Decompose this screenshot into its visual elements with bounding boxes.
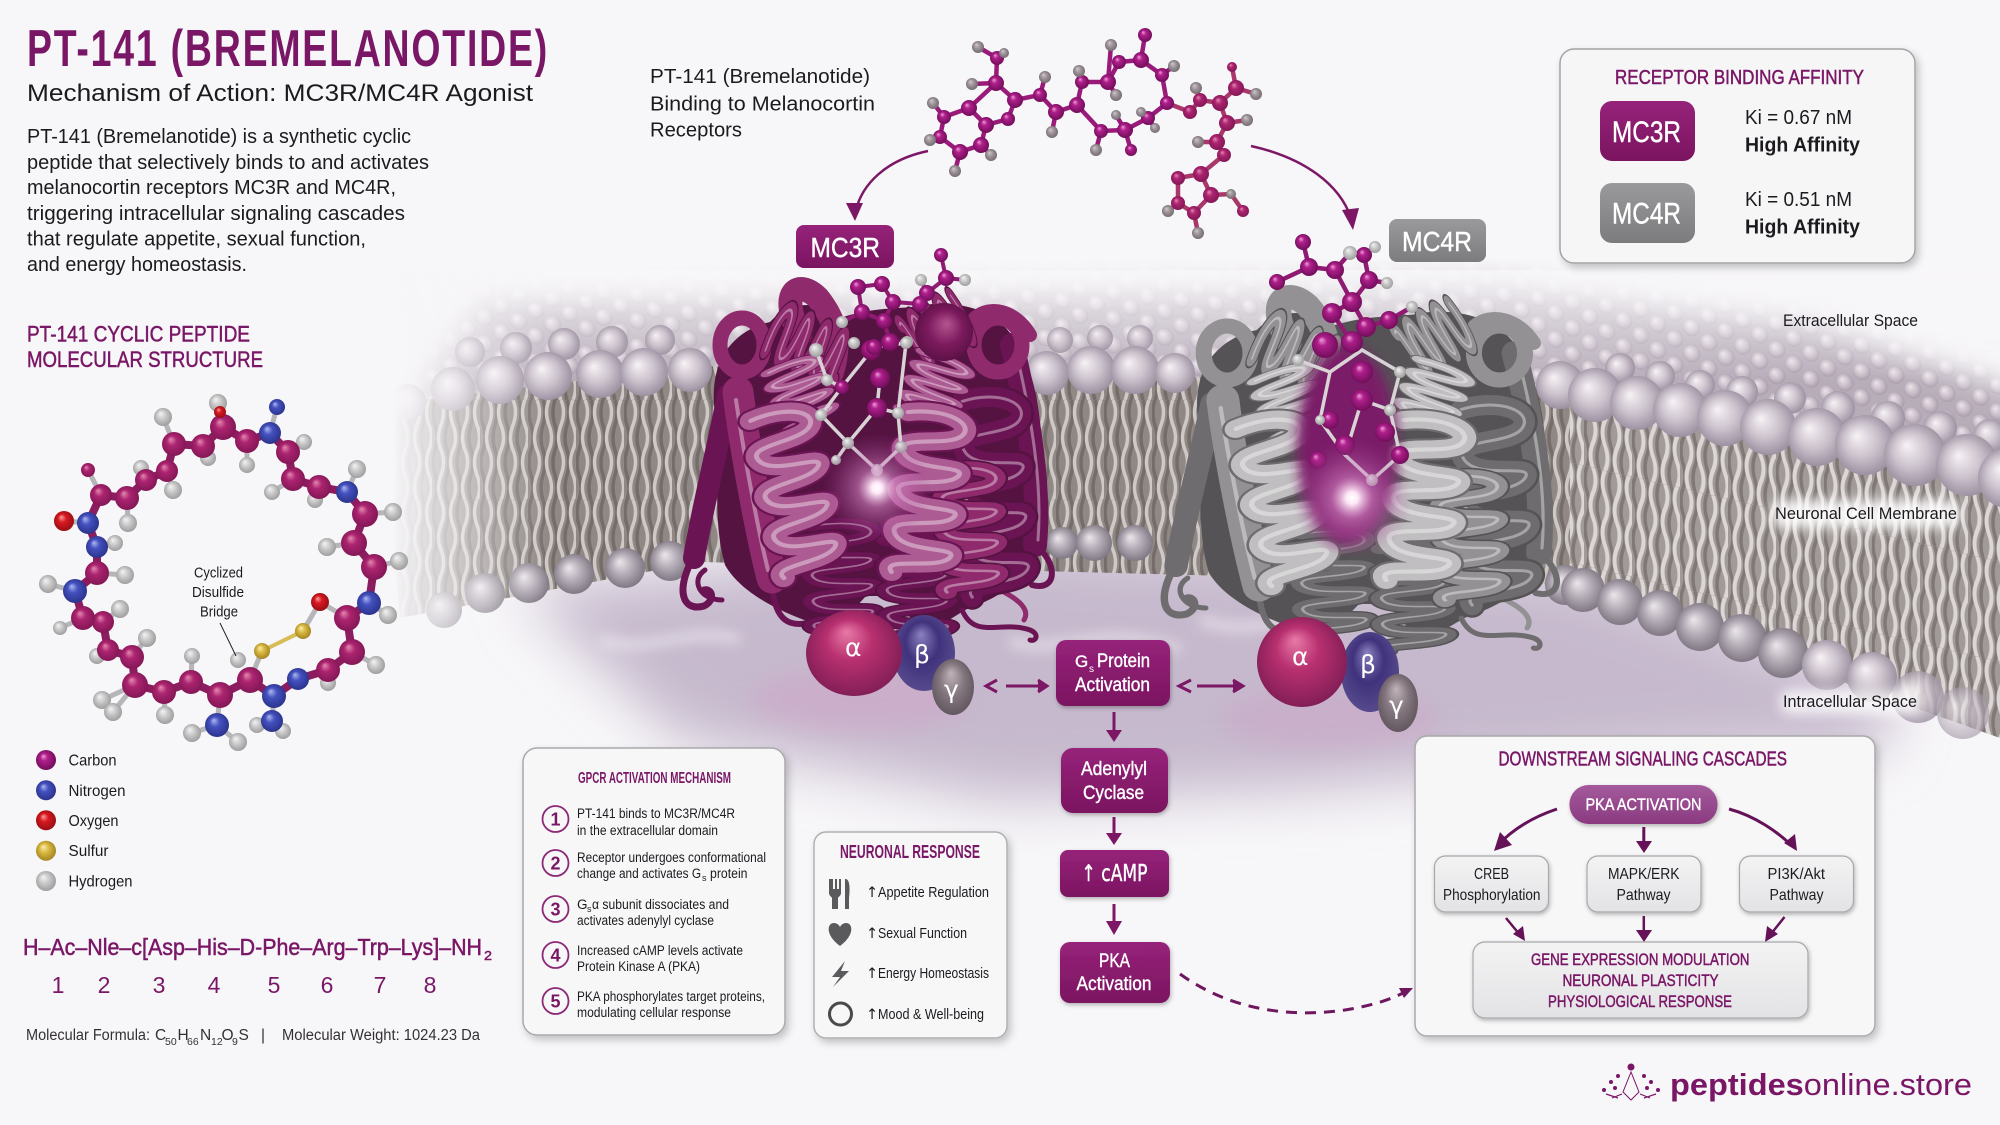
molecular formula and weight: 9 — [232, 1036, 238, 1048]
box: CREB — [1434, 856, 1548, 912]
panel: neuronal response: Energy Homeostasis — [878, 966, 989, 982]
flow box: Gs protein activation: Protein — [1097, 651, 1150, 672]
membrane label: extracellular space: Extracellular Space — [1783, 311, 1918, 330]
step 1: 1 — [550, 810, 561, 830]
molecular formula and weight: Molecular Weight: 1024.23 Da — [282, 1027, 480, 1044]
dashed arrow: PKA to downstream cascades — [1180, 974, 1413, 1013]
molecular formula and weight: S — [238, 1027, 249, 1044]
panel: neuronal response: Mood & Well-being — [878, 1007, 984, 1023]
panel: GPCR activation mechanism: GPCR ACTIVATION MECHANISM — [578, 770, 731, 787]
logo text: peptidesonline.store — [1670, 1067, 1972, 1102]
step 5: modulating cellular response — [577, 1005, 731, 1020]
box: gene expression outcome — [1473, 942, 1808, 1018]
heading: molecular structure — [27, 322, 263, 372]
membrane label: intracellular space: Intracellular Space — [1783, 692, 1917, 711]
panel: receptor binding affinity: Ki = 0.51 nM — [1745, 188, 1852, 211]
residue numbers: 5 — [268, 972, 280, 998]
heading: molecular structure: PT-141 CYCLIC PEPTIDE — [27, 322, 250, 346]
step 5 — [542, 988, 765, 1020]
residue numbers: 1 — [52, 972, 64, 998]
step 4: Increased cAMP levels activate — [577, 943, 743, 958]
step 2: change and activates G — [577, 866, 701, 881]
intro text: that regulate appetite, sexual function, — [27, 228, 366, 250]
residue numbers: 4 — [208, 972, 221, 998]
panel: neuronal response: Sexual Function — [878, 926, 967, 942]
step 5: 5 — [550, 992, 561, 1012]
box: PI3K/Akt — [1740, 856, 1854, 912]
G protein MC4R: α — [1292, 642, 1308, 671]
panel: receptor binding affinity: Ki = 0.67 nM — [1745, 106, 1852, 129]
molecular formula and weight: N — [200, 1027, 211, 1044]
atom legend: Hydrogen — [68, 874, 132, 890]
flow box: adenylyl cyclase: Adenylyl — [1081, 759, 1147, 780]
binding site glow MC4R — [1292, 438, 1412, 558]
flow box: PKA activation: PKA — [1099, 951, 1130, 972]
heading: molecular structure: MOLECULAR STRUCTURE — [27, 347, 263, 372]
molecular formula and weight: H — [178, 1027, 189, 1044]
step 5: PKA phosphorylates target proteins, — [577, 989, 765, 1004]
label: MC4R — [1389, 219, 1486, 262]
molecular formula and weight: 66 — [187, 1036, 199, 1048]
arrow: cAMP to PKA — [1106, 904, 1122, 935]
panel: neuronal response: ↑ — [866, 966, 878, 982]
flow box: Gs protein activation — [1056, 640, 1170, 706]
step 1: PT-141 binds to MC3R/MC4R — [577, 806, 735, 821]
step 3: α subunit dissociates and — [592, 897, 729, 912]
box: MAPK/ERK — [1587, 856, 1701, 912]
flow box: Gs protein activation: s — [1089, 664, 1094, 675]
box: CREB: CREB — [1474, 866, 1509, 883]
peptide sequence: H–Ac–Nle–c[Asp–His–D-Phe–Arg–Trp–Lys]–NH — [23, 934, 482, 960]
step 3: activates adenylyl cyclase — [577, 913, 714, 928]
molecular formula and weight: 50 — [165, 1036, 177, 1048]
icon: mood ring — [830, 1003, 852, 1025]
panel: receptor binding affinity: RECEPTOR BINDING AFFINITY — [1615, 66, 1864, 89]
label: cyclized disulfide bridge: Cyclized — [194, 564, 243, 582]
intro text — [27, 126, 429, 276]
G protein MC4R: γ — [1389, 691, 1404, 720]
molecular formula and weight: Molecular Formula: — [26, 1027, 150, 1044]
G protein MC3R: γ — [944, 675, 959, 704]
step 3: s — [587, 904, 592, 914]
panel: neuronal response: ↑ — [866, 885, 878, 901]
step 1: in the extracellular domain — [577, 823, 718, 838]
cyclic peptide molecule — [39, 394, 408, 751]
molecular formula and weight — [26, 1027, 480, 1048]
molecular formula and weight: 12 — [211, 1036, 223, 1048]
panel: neuronal response: NEURONAL RESPONSE — [840, 842, 980, 862]
label: MC3R — [796, 225, 894, 268]
step 2: protein — [710, 866, 748, 881]
arrow: molecule to MC3R — [846, 151, 928, 221]
residue numbers: 3 — [153, 972, 165, 998]
panel: receptor binding affinity: High Affinity — [1745, 134, 1861, 156]
panel: GPCR activation mechanism — [523, 748, 785, 1035]
label: cyclized disulfide bridge — [192, 564, 244, 656]
MC3R receptor protein — [683, 289, 1052, 643]
step 2 — [542, 850, 766, 883]
G protein MC3R — [806, 610, 974, 715]
box: CREB: Phosphorylation — [1443, 887, 1540, 904]
ligand bound inside MC3R — [809, 248, 971, 476]
label: cyclized disulfide bridge: Disulfide — [192, 584, 244, 601]
residue numbers: 8 — [424, 972, 436, 998]
peptide sequence: 2 — [484, 948, 492, 963]
molecular formula and weight: C — [155, 1027, 166, 1044]
panel: receptor binding affinity: MC3R — [1612, 116, 1681, 149]
panel: downstream signaling cascades — [1415, 736, 1875, 1036]
molecular formula and weight: O — [222, 1027, 234, 1044]
label: cyclized disulfide bridge: Bridge — [200, 604, 238, 620]
intro text: peptide that selectively binds to and activates — [27, 152, 429, 174]
pill: PKA activation: PKA ACTIVATION — [1586, 795, 1702, 814]
atom legend: Oxygen — [68, 813, 118, 830]
atom legend: Sulfur — [68, 843, 109, 860]
arrow: Gs to adenylyl cyclase — [1106, 712, 1122, 742]
box: MAPK/ERK: Pathway — [1616, 887, 1670, 904]
atom legend: Nitrogen — [68, 783, 126, 800]
panel: neuronal response: Appetite Regulation — [878, 885, 989, 901]
title: PT-141 (BREMELANOTIDE) — [27, 20, 549, 78]
step 3 — [542, 896, 729, 928]
residue numbers: 6 — [321, 972, 333, 998]
box: gene expression outcome: GENE EXPRESSION MODULATION — [1531, 951, 1750, 969]
box: gene expression outcome: NEURONAL PLASTICITY — [1562, 972, 1718, 990]
step 4: Protein Kinase A (PKA) — [577, 959, 700, 974]
flow box: Gs protein activation: G — [1075, 652, 1088, 671]
panel: receptor binding affinity: MC4R — [1612, 198, 1681, 230]
G protein MC4R — [1257, 617, 1418, 732]
flow box: adenylyl cyclase: Cyclase — [1083, 783, 1144, 804]
intro text: PT-141 (Bremelanotide) is a synthetic cyclic — [27, 126, 411, 148]
box: MAPK/ERK: MAPK/ERK — [1608, 866, 1680, 883]
icon: lightning bolt — [832, 961, 849, 987]
panel: receptor binding affinity — [1560, 49, 1915, 263]
box: PI3K/Akt: PI3K/Akt — [1768, 866, 1826, 883]
MC4R receptor protein — [1164, 297, 1557, 651]
residue numbers: 2 — [98, 972, 110, 998]
intro text: melanocortin receptors MC3R and MC4R, — [27, 177, 396, 199]
panel: neuronal response: ↑ — [866, 1007, 878, 1023]
flow box: cAMP: ↑ cAMP — [1082, 861, 1148, 887]
icon: heart — [829, 923, 851, 946]
intro text: and energy homeostasis. — [27, 254, 247, 276]
step 2: 2 — [550, 854, 561, 874]
G protein MC4R: β — [1360, 650, 1376, 679]
logo icon — [1602, 1064, 1660, 1100]
step 2: Receptor undergoes conformational — [577, 850, 766, 865]
binding site glow MC3R — [822, 433, 932, 543]
arrows: PKA to pathways — [1494, 809, 1797, 853]
step 3: 3 — [550, 900, 561, 920]
G protein MC3R: α — [845, 633, 861, 662]
flow box: Gs protein activation: Activation — [1075, 675, 1150, 696]
box: PI3K/Akt: Pathway — [1770, 887, 1824, 904]
G protein MC3R: β — [914, 640, 930, 669]
panel: receptor binding affinity: High Affinity — [1745, 216, 1861, 238]
binding caption: PT-141 (Bremelanotide) — [650, 65, 870, 88]
membrane label: neuronal cell membrane: Neuronal Cell Membrane — [1775, 504, 1957, 523]
neuronal cell membrane bilayer — [360, 260, 2000, 739]
atom legend: Carbon — [68, 752, 116, 770]
flow box: cAMP — [1060, 850, 1169, 897]
arrow: molecule to MC4R — [1251, 146, 1359, 230]
pill: PKA activation — [1570, 785, 1718, 824]
residue numbers — [52, 972, 436, 998]
binding caption: Receptors — [650, 118, 742, 142]
step 3: G — [577, 897, 588, 912]
intro text: triggering intracellular signaling cascades — [27, 203, 405, 225]
flow box: PKA activation — [1060, 942, 1170, 1003]
box: gene expression outcome: PHYSIOLOGICAL RESPONSE — [1548, 993, 1732, 1011]
intracellular floor shading — [520, 540, 1900, 800]
residue numbers: 7 — [374, 972, 386, 998]
label: MC4R: MC4R — [1402, 226, 1472, 257]
label: MC3R: MC3R — [810, 232, 880, 263]
step 4: 4 — [550, 946, 561, 966]
arrow: adenylyl cyclase to cAMP — [1106, 817, 1122, 845]
ligand bound inside MC4R — [1269, 234, 1418, 486]
icon: fork and knife — [829, 879, 850, 909]
flow box: PKA activation: Activation — [1076, 974, 1152, 995]
step 4 — [542, 942, 743, 974]
free PT-141 molecule — [924, 28, 1262, 239]
step 2: s — [702, 873, 707, 883]
atom legend — [36, 750, 132, 891]
double arrow: Gs to MC4R G protein — [1179, 680, 1243, 692]
step 1 — [542, 806, 735, 838]
panel: downstream signaling cascades: DOWNSTREAM SIGNALING CASCADES — [1498, 748, 1787, 770]
binding caption — [650, 65, 875, 142]
membrane label: neuronal cell membrane — [1772, 500, 1960, 528]
double arrow: MC3R G protein to Gs — [986, 680, 1047, 692]
flow box: adenylyl cyclase — [1061, 748, 1168, 813]
panel: neuronal response: ↑ — [866, 926, 878, 942]
arrows: pathways to gene expression — [1506, 916, 1784, 942]
binding caption: Binding to Melanocortin — [650, 92, 875, 116]
molecular formula and weight: | — [261, 1027, 265, 1044]
subtitle: Mechanism of Action: MC3R/MC4R Agonist — [27, 80, 533, 107]
panel: neuronal response — [814, 832, 1007, 1038]
